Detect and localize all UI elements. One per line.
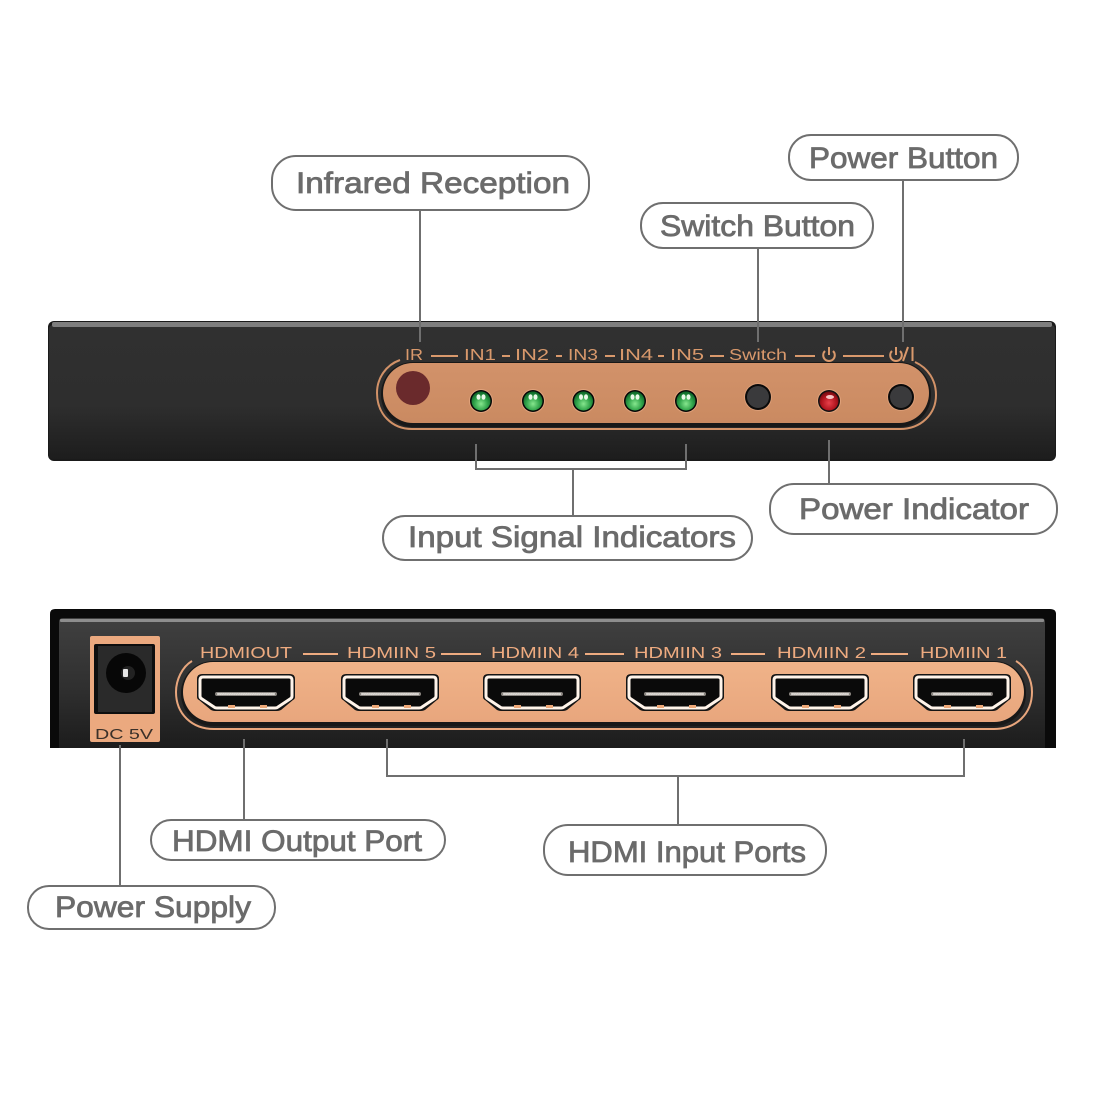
icon: power symbol bbox=[823, 347, 835, 361]
label: Switch Button: Switch Button bbox=[660, 210, 855, 243]
DC 5V power jack bbox=[90, 636, 160, 743]
label: HDMI Output Port: HDMI Output Port bbox=[172, 825, 423, 858]
rear port labels: HDMIIN 1 bbox=[920, 645, 1007, 662]
rear port labels: HDMIIN 5 bbox=[347, 645, 436, 662]
callout bracket: input signal indicators bbox=[476, 444, 686, 516]
label: Power Indicator: Power Indicator bbox=[799, 493, 1029, 526]
front port labels: IN2 bbox=[515, 347, 549, 364]
infrared window bbox=[396, 371, 430, 405]
power LED bbox=[817, 389, 841, 413]
front port labels: IN1 bbox=[464, 347, 496, 364]
rear copper port strip bbox=[176, 661, 1032, 729]
label: Input Signal Indicators: Input Signal Indicators bbox=[408, 521, 736, 554]
HDMI input ports bbox=[341, 674, 1011, 711]
label: Power Button: Power Button bbox=[809, 142, 998, 175]
front port labels: IN4 bbox=[619, 347, 653, 364]
callout line: infrared bbox=[419, 210, 421, 342]
front port labels: IN3 bbox=[568, 347, 598, 364]
callout line: power button bbox=[902, 180, 904, 342]
input signal LEDs bbox=[469, 389, 698, 413]
label: Power Indicator bbox=[770, 484, 1057, 534]
callout line: switch button bbox=[757, 248, 759, 342]
label: Infrared Reception: Infrared Reception bbox=[296, 167, 570, 200]
front port labels bbox=[405, 347, 884, 364]
label: Power Button bbox=[789, 135, 1018, 180]
panel: front of device bbox=[48, 321, 1056, 461]
rear port labels bbox=[200, 645, 1007, 662]
label: HDMI Input Ports bbox=[544, 825, 826, 875]
callout line: HDMI output bbox=[243, 739, 245, 820]
power button bbox=[887, 383, 915, 411]
top highlight strip bbox=[52, 322, 1052, 327]
callout line: power supply bbox=[119, 745, 121, 886]
label: Power Supply bbox=[28, 886, 275, 929]
rear port labels: HDMIIN 3 bbox=[634, 645, 722, 662]
front port labels: IN5 bbox=[670, 347, 704, 364]
label: Switch Button bbox=[641, 203, 873, 248]
DC 5V power jack: DC 5V bbox=[95, 726, 153, 743]
front copper control strip bbox=[377, 360, 936, 429]
label: HDMI Output Port bbox=[151, 820, 445, 860]
label: Infrared Reception bbox=[272, 156, 589, 210]
rear port labels: HDMIIN 2 bbox=[777, 645, 866, 662]
icon: power toggle symbol bbox=[890, 347, 912, 361]
panel: rear of device bbox=[50, 609, 1056, 748]
label: Power Supply: Power Supply bbox=[55, 891, 251, 924]
front port labels: IR bbox=[405, 347, 423, 364]
HDMI output port bbox=[197, 674, 295, 711]
rear port labels: HDMIIN 4 bbox=[491, 645, 579, 662]
switch button bbox=[744, 383, 772, 411]
label: Input Signal Indicators bbox=[383, 516, 752, 560]
label: HDMI Input Ports: HDMI Input Ports bbox=[568, 836, 806, 869]
rear port labels: HDMIOUT bbox=[200, 645, 292, 662]
rear highlight strip bbox=[60, 619, 1044, 622]
callout line: power indicator bbox=[828, 440, 830, 484]
callout bracket: HDMI inputs bbox=[387, 739, 964, 825]
front port labels: Switch bbox=[729, 347, 787, 364]
